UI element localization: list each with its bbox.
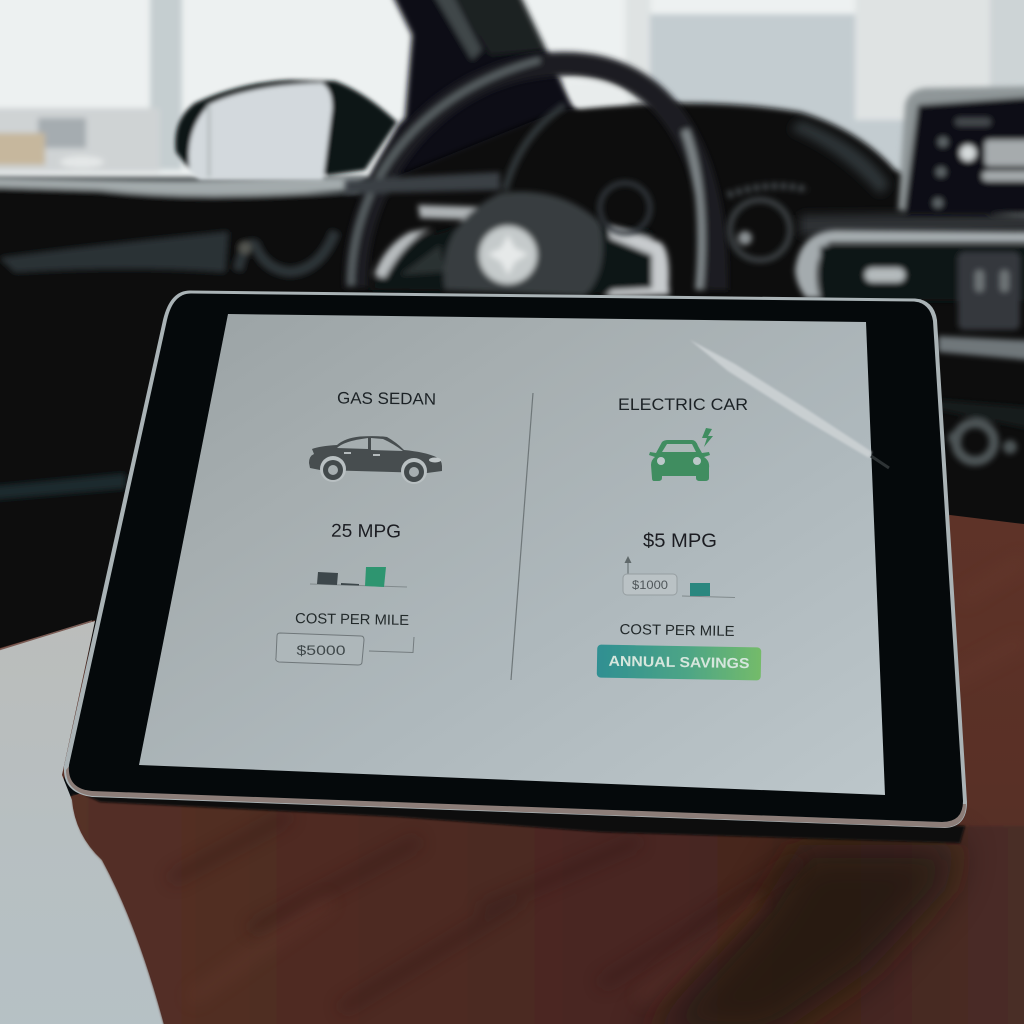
- air vent and controls: [795, 230, 1024, 461]
- center display: [898, 86, 1024, 218]
- side mirror: [175, 80, 397, 180]
- reflection of tablet: [640, 845, 960, 1024]
- panel: electric car: [597, 395, 761, 680]
- center divider: [511, 393, 533, 680]
- steering wheel: [345, 60, 716, 297]
- bar chart: electric: [682, 583, 735, 598]
- label: cost per mile: COST PER MILE: [295, 611, 410, 629]
- heading: electric car: ELECTRIC CAR: [618, 395, 748, 414]
- tablet screen: [139, 314, 885, 795]
- arrow: up: [624, 556, 632, 574]
- panel: gas sedan: [276, 389, 442, 665]
- pillars: [370, 0, 590, 185]
- connector line: [369, 637, 414, 652]
- bezel scratch: [871, 456, 889, 468]
- screen glare: [690, 340, 872, 458]
- badge: annual savings: [597, 645, 761, 680]
- metric: 25 MPG: 25 MPG: [331, 520, 401, 541]
- badge: annual savings: ANNUAL SAVINGS: [608, 654, 750, 672]
- value box: $1000: [623, 574, 677, 595]
- label: cost per mile: COST PER MILE: [619, 622, 735, 640]
- instrument cluster: [600, 183, 808, 260]
- table: [0, 515, 1024, 1024]
- dash highlights: [790, 120, 1024, 236]
- wood grain: [170, 815, 800, 1010]
- value box: $5000: [276, 633, 364, 665]
- metric: $5 MPG: $5 MPG: [643, 530, 717, 552]
- door and dashboard: [0, 103, 1024, 700]
- tablet shadow: [85, 795, 965, 843]
- value box: $1000: $1000: [632, 580, 668, 592]
- tablet body: [64, 290, 967, 828]
- icon: sedan: [309, 436, 442, 484]
- heading: gas sedan: GAS SEDAN: [337, 389, 436, 409]
- windows behind the windshield: [0, 0, 1024, 184]
- tablet: [64, 290, 967, 828]
- icon: electric car: [649, 428, 713, 481]
- table light zone: [0, 621, 168, 1024]
- icon: lightning bolt: [702, 428, 713, 447]
- value box: $5000: $5000: [296, 643, 346, 658]
- bar chart: gas: [310, 567, 407, 587]
